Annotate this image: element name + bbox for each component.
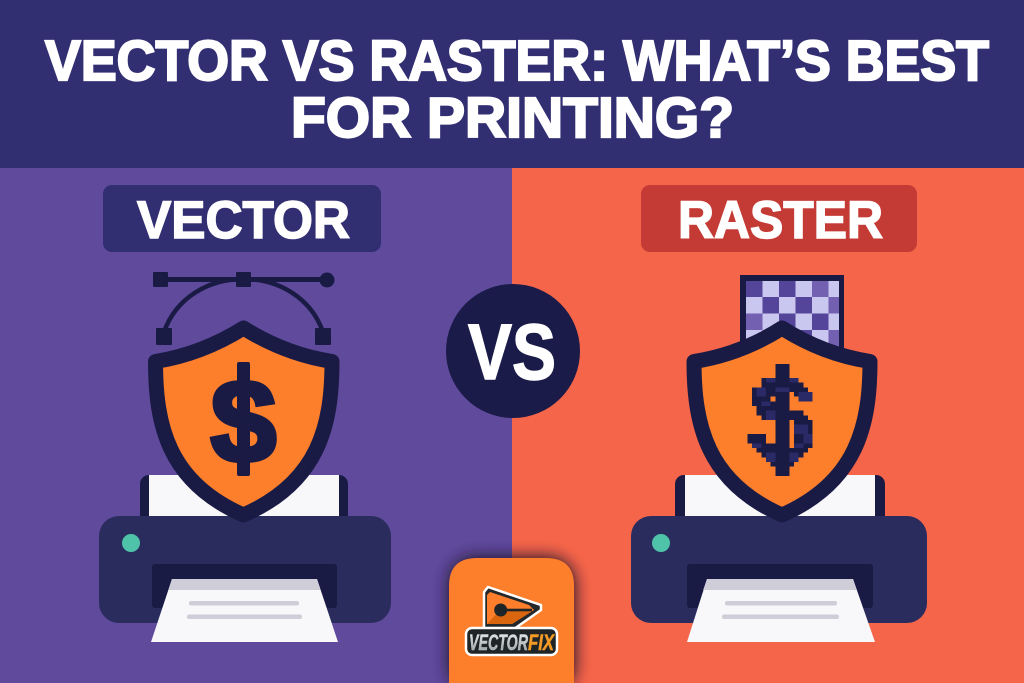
title line 1: VECTOR VS RASTER: WHAT’S BEST [45, 29, 989, 93]
paper behind shield [149, 475, 339, 516]
printer body [631, 516, 927, 623]
raster label [641, 185, 917, 252]
icon: bezier path handles [153, 272, 334, 345]
printer body [99, 516, 391, 623]
icon: raster shield [694, 328, 870, 515]
title banner [0, 0, 1024, 168]
printer rear tray [140, 475, 348, 535]
pixelated dollar sign [747, 364, 813, 476]
panel: raster background [512, 0, 1024, 683]
icon: pixel checker image [740, 275, 844, 350]
output paper [687, 579, 875, 642]
raster label: RASTER [678, 191, 883, 250]
paper behind shield [685, 475, 875, 516]
output slot [152, 564, 337, 608]
logo tile [447, 555, 577, 683]
icon: raster printer [631, 475, 927, 642]
panel: vector background [0, 0, 512, 683]
icon: vector shield [156, 328, 332, 515]
VS badge: VS [468, 307, 556, 396]
vector label [103, 185, 381, 252]
printer rear tray [675, 475, 885, 535]
VS badge [446, 284, 580, 418]
vector dollar sign: $ [211, 356, 276, 488]
output slot [687, 564, 873, 608]
lighter pixels [752, 378, 813, 462]
icon: vector printer [99, 475, 391, 642]
logo: wordmark: VECTOR [469, 630, 528, 655]
vector label: VECTOR [137, 191, 350, 250]
logo: wordmark: FIX [528, 630, 555, 655]
logo: pen nib mark [484, 587, 541, 629]
output paper [151, 579, 338, 642]
status light [122, 534, 140, 552]
title line 2: FOR PRINTING? [291, 86, 734, 150]
status light [652, 534, 670, 552]
